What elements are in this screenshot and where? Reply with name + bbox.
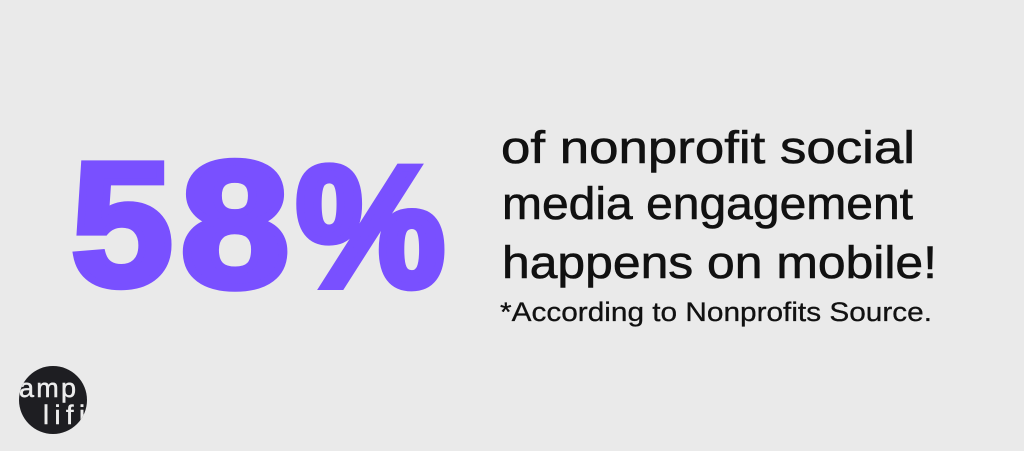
logo: amplifi: lifi	[43, 400, 85, 430]
statement text	[501, 122, 937, 288]
statement text: media engagement	[502, 178, 914, 229]
statement text: of nonprofit social	[501, 122, 915, 173]
big statistic: 58%: 8	[181, 125, 289, 324]
big statistic: 58%: 5	[71, 127, 173, 323]
logo: amplifi: amp	[19, 373, 76, 403]
statement text: happens on mobile!	[502, 237, 937, 288]
big statistic: 58%	[71, 125, 445, 324]
source note: *According to Nonprofits Source.	[500, 297, 932, 327]
logo: amplifi	[19, 366, 87, 434]
big statistic: 58%: %	[296, 131, 445, 323]
